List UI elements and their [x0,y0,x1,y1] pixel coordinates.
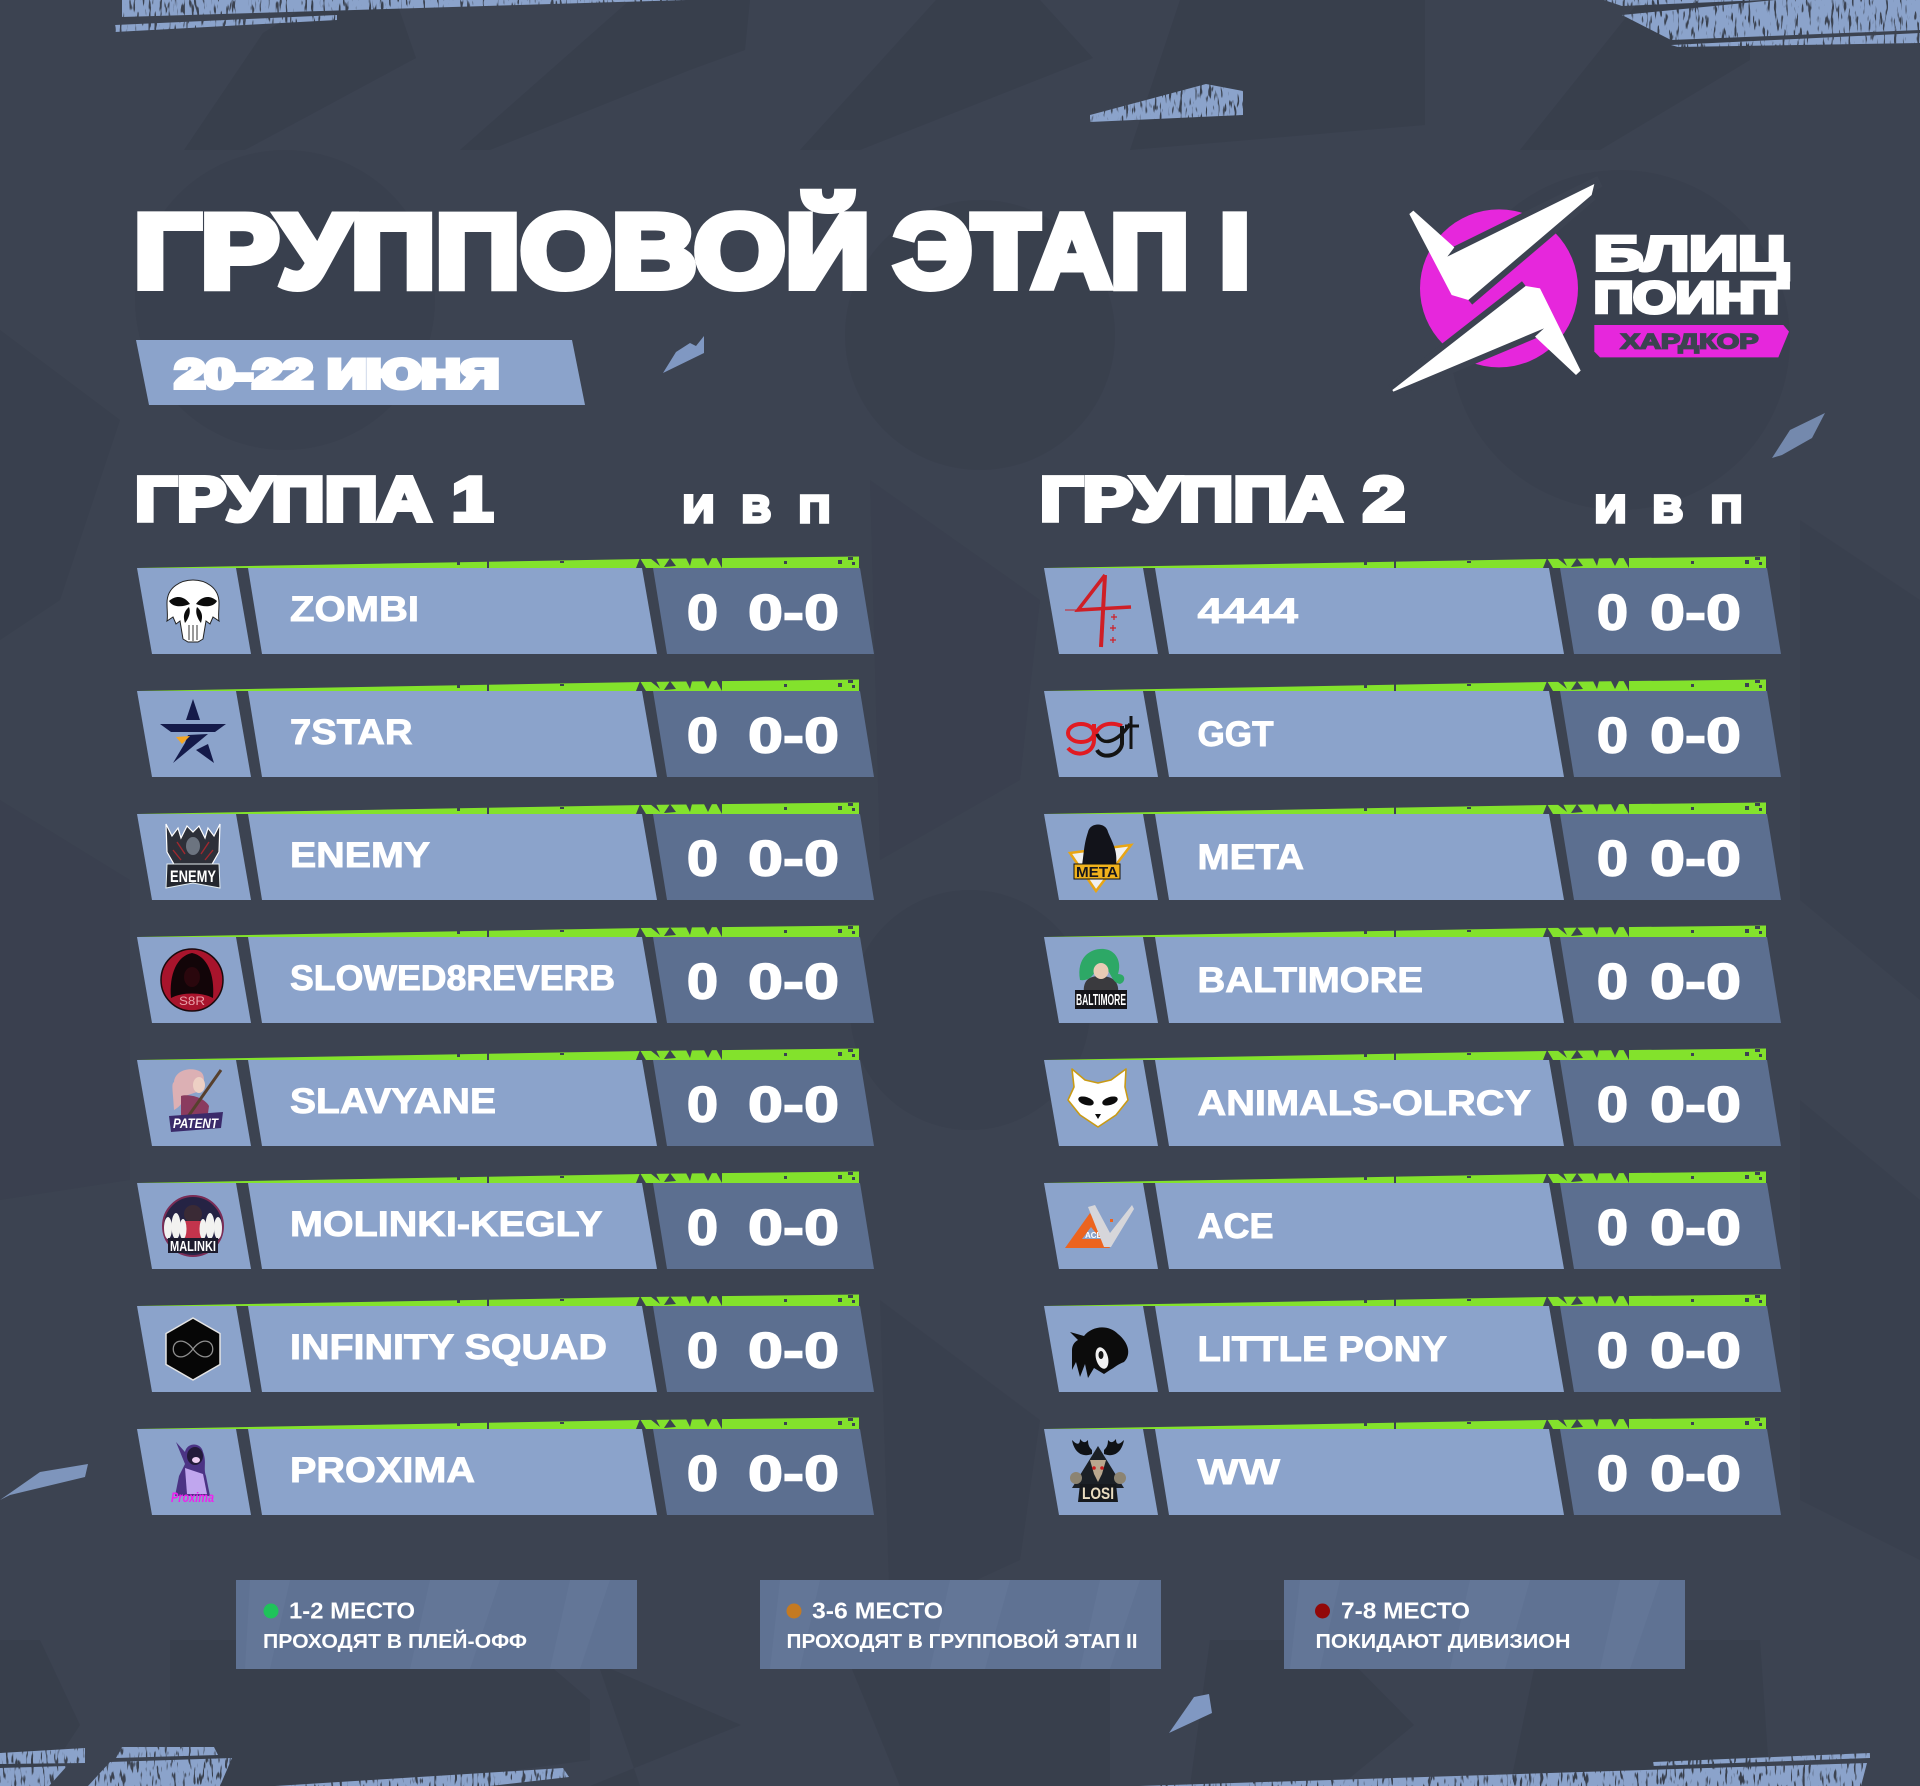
icon: white cat [1068,1069,1128,1127]
legend: 1-2 place [236,1580,637,1669]
legend text: ПОКИДАЮТ ДИВИЗИОН [1316,1631,1570,1653]
icon: red four [1065,575,1131,647]
legend title: 1-2 МЕСТО [289,1598,415,1624]
team name: PROXIMA [290,1451,475,1490]
grunge stroke: bottom left [0,1747,569,1786]
icon: baltimore girl [1075,949,1127,1009]
status dot [264,1604,278,1618]
icon: proxima figure [171,1442,214,1505]
score: 0 [1597,1446,1628,1502]
grunge stroke: bottom right [1139,1753,1870,1786]
icon: skull [167,580,219,642]
status dot [786,1604,802,1618]
score [687,1076,839,1132]
team name: LITTLE PONY [1198,1330,1447,1369]
score [687,1200,839,1256]
team name: 4444 [1198,592,1299,631]
score: 0-0 [748,584,839,640]
team name: META [1198,838,1304,877]
score [1597,584,1741,640]
score: 0 [687,708,718,764]
score: 0-0 [1650,584,1741,640]
icon: meta hood [1070,824,1131,891]
team name: ENEMY [290,836,430,875]
score [687,584,839,640]
icon: meta hood: META [1076,864,1118,881]
logo wordmark: ПОИНТ [1594,273,1788,322]
logo wordmark: БЛИЦ [1594,227,1789,281]
icon: baltimore girl: BALTIMORE [1076,992,1126,1009]
column headers: group 2: И [1595,489,1626,531]
legend: 7-8 place [1284,1580,1685,1669]
team row: 4444 [1044,556,1781,654]
icon: enemy mascot: ENEMY [170,867,216,886]
score: 0-0 [748,830,839,886]
score [1597,830,1741,886]
team name: WW [1198,1453,1280,1492]
score: 0-0 [748,708,839,764]
column headers: group 1: И [683,489,714,531]
heading: group 2: ГРУППА 2 [1040,466,1405,534]
score [1597,1200,1741,1256]
score: 0 [687,1076,718,1132]
column headers: group 1 [683,489,830,531]
team name: ACE [1198,1207,1274,1246]
team name: INFINITY SQUAD [290,1328,607,1367]
score [1597,954,1741,1010]
score: 0-0 [1650,1446,1741,1502]
score: 0 [1597,1200,1628,1256]
score: 0-0 [1650,1076,1741,1132]
score: 0 [687,1200,718,1256]
date badge: 20-22 ИЮНЯ [175,352,499,396]
score: 0-0 [1650,830,1741,886]
score: 0-0 [748,1446,839,1502]
team name: 7STAR [290,713,412,752]
team row: PROXIMA [137,1418,874,1515]
team row: GGT [1044,680,1781,777]
team row: WW [1044,1418,1781,1515]
team row: BALTIMORE [1044,926,1781,1023]
date badge [136,340,585,405]
icon: ace triangle: ACE [1085,1231,1103,1240]
score: 0-0 [748,1200,839,1256]
legend text: ПРОХОДЯТ В ГРУППОВОЙ ЭТАП II [786,1629,1138,1653]
score [1597,708,1741,764]
score: 0-0 [748,1322,839,1378]
score: 0 [687,1322,718,1378]
team name: BALTIMORE [1198,961,1423,1000]
score [687,1446,839,1502]
team row: INFINITY SQUAD [137,1294,874,1392]
score: 0-0 [748,954,839,1010]
team row: SLOWED8REVERB [137,926,874,1023]
column headers: group 1: В [742,489,771,531]
legend title: 3-6 МЕСТО [812,1598,943,1624]
icon: pony [1070,1327,1128,1378]
team row: ANIMALS-OLRCY [1044,1048,1781,1146]
icon: ace triangle [1065,1205,1134,1248]
score: 0 [687,1446,718,1502]
logo tag: Хардкор [1594,325,1789,357]
legend title: 7-8 МЕСТО [1341,1598,1470,1624]
score: 0-0 [1650,1322,1741,1378]
shard: bottom [1169,1694,1212,1733]
score: 0 [1597,954,1628,1010]
team name: ZOMBI [290,590,419,629]
score [687,954,839,1010]
icon: losi moose: LOSI [1082,1484,1114,1503]
column headers: group 2 [1595,489,1742,531]
logo tag: Хардкор: ХАРДКОР [1621,330,1759,354]
icon: ggt [1068,716,1139,756]
title [134,193,1250,310]
score: 0 [1597,830,1628,886]
logo: Блиц Поинт Хардкор [1392,181,1789,392]
team row: ZOMBI [137,556,874,654]
score: 0-0 [1650,1200,1741,1256]
shard: near date [663,336,704,373]
shard: top middle [1090,84,1243,122]
score [1597,1322,1741,1378]
column headers: group 2: П [1711,489,1742,531]
team name: SLAVYANE [290,1082,496,1121]
status dot [1315,1604,1330,1618]
team row: ACE [1044,1172,1781,1269]
score: 0-0 [1650,708,1741,764]
team row: ENEMY [137,802,874,900]
team name: ANIMALS-OLRCY [1198,1084,1531,1123]
shard: left [0,1464,88,1500]
column headers: group 2: В [1653,489,1683,531]
logo wordmark [1594,227,1789,322]
score: 0-0 [1650,954,1741,1010]
grunge stroke: top right [1604,0,1920,47]
legend: 3-6 place [760,1580,1161,1669]
score: 0 [1597,1322,1628,1378]
score: 0-0 [748,1076,839,1132]
score [687,830,839,886]
icon: malinki bowling [163,1196,223,1256]
score: 0 [687,954,718,1010]
score [687,1322,839,1378]
title: ЭТАП I [894,194,1250,310]
score: 0 [1597,708,1628,764]
score [1597,1076,1741,1132]
icon: infinity hexagon [166,1318,220,1380]
icon: patent girl: PATENT [173,1115,219,1131]
icon: losi moose [1070,1439,1126,1503]
legend text: ПРОХОДЯТ В ПЛЕЙ-ОФФ [263,1629,527,1653]
shard: right [1772,413,1825,458]
score [687,708,839,764]
score [1597,1446,1741,1502]
icon: proxima figure: Proxima [171,1489,214,1505]
grunge stroke: top left [115,0,686,32]
team row: META [1044,802,1781,900]
score: 0 [687,830,718,886]
heading: group 1: ГРУППА 1 [135,466,493,534]
team row: SLAVYANE [137,1048,874,1146]
score: 0 [687,584,718,640]
logo emblem [1392,181,1600,392]
icon: red hood: S8R [179,994,205,1008]
icon: red hood [161,949,223,1011]
icon: enemy mascot [166,824,220,888]
icon: patent girl [169,1069,223,1132]
team row: 7STAR [137,680,874,777]
team name: GGT [1198,715,1274,754]
team name: SLOWED8REVERB [290,959,615,998]
team row: MOLINKI-KEGLY [137,1172,874,1269]
score: 0 [1597,584,1628,640]
column headers: group 1: П [799,489,830,531]
score: 0 [1597,1076,1628,1132]
icon: star [160,699,226,763]
team row: LITTLE PONY [1044,1294,1781,1392]
team name: MOLINKI-KEGLY [290,1205,602,1244]
icon: malinki bowling: MALINKI [170,1238,216,1255]
title: ГРУППОВОЙ [134,193,870,310]
